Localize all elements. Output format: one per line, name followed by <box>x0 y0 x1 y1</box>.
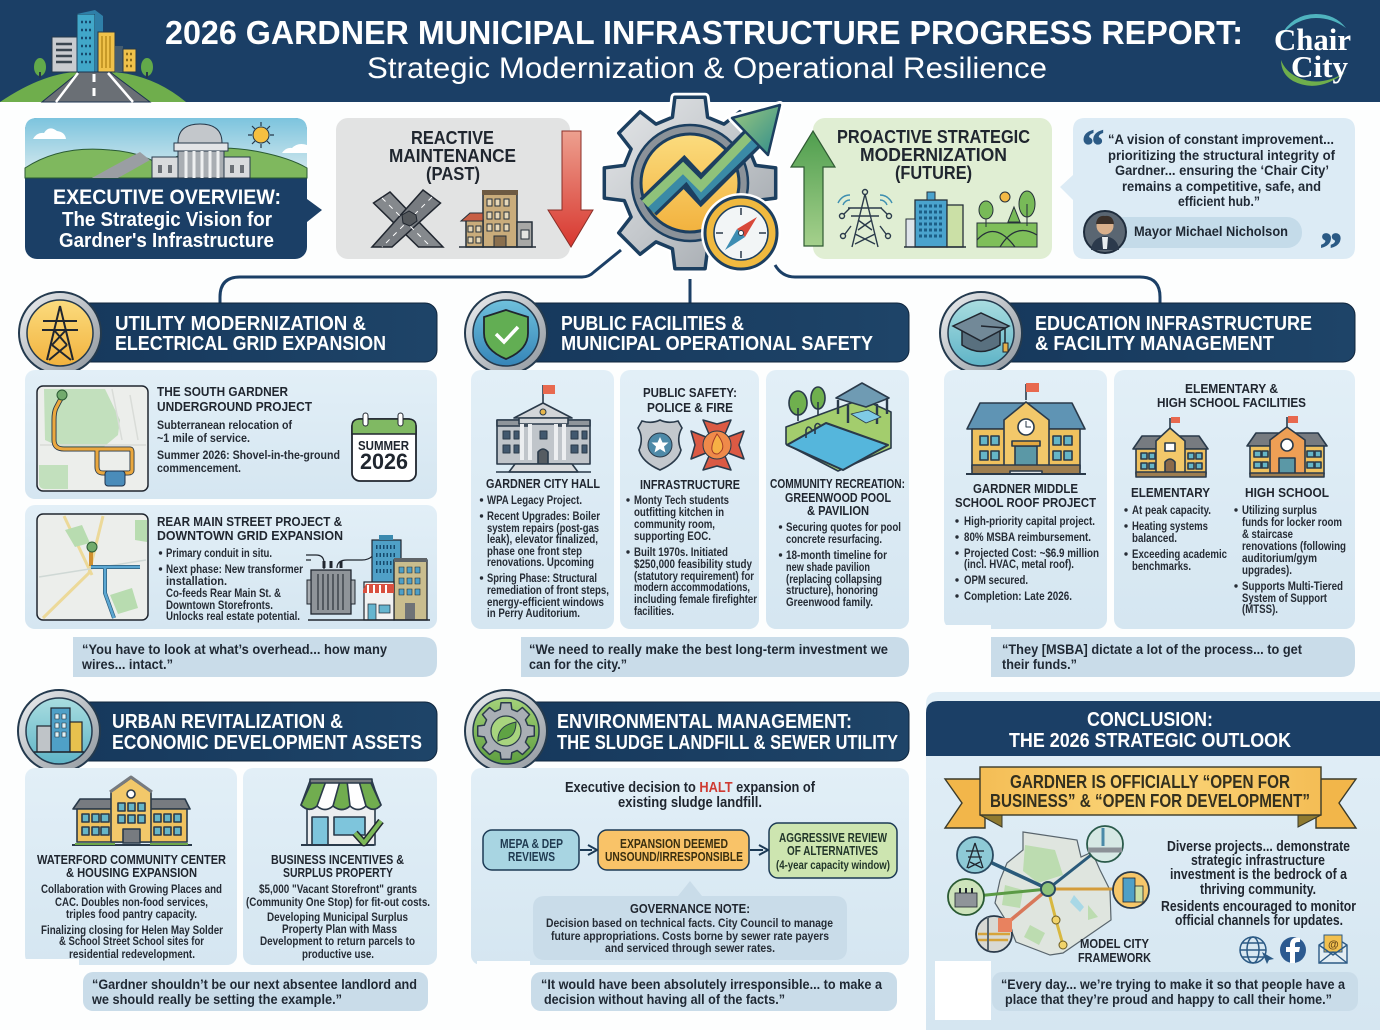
icon: waterford building <box>72 777 192 845</box>
card: gardner middle school roof: OPM secured. <box>964 573 1028 587</box>
card: gardner middle school roof: Projected Cost: ~$6.9 million <box>964 546 1099 560</box>
card: community recreation: new shade pavilion <box>786 560 870 574</box>
icon: smart tower <box>838 190 892 247</box>
overview heading: EXECUTIVE OVERVIEW: <box>53 186 281 209</box>
card: south gardner underground: UNDERGROUND PROJECT <box>157 399 312 414</box>
card: rear main street: DOWNTOWN GRID EXPANSION <box>157 528 343 543</box>
icon: summer 2026 calendar <box>352 413 416 481</box>
card: public safety police and fire: (statutory requirement) for <box>634 569 754 583</box>
icon: elementary school <box>1133 417 1208 477</box>
icon: green landscape <box>977 191 1037 247</box>
icon: summer 2026 calendar: SUMMER <box>358 438 410 453</box>
card: public safety police and fire: PUBLIC SAFETY: <box>643 385 737 400</box>
mayor name tag: Mayor Michael Nicholson <box>1134 223 1288 239</box>
card: business incentives: BUSINESS INCENTIVES & <box>271 852 404 867</box>
quote: proud and happy: place that they’re proud and happy to call their home.” <box>1005 991 1332 1007</box>
icon: email envelope <box>1319 935 1347 963</box>
card: community recreation: 18-month timeline for <box>786 548 887 562</box>
governance note callout <box>533 881 847 960</box>
card: gardner middle school roof: Completion: Late 2026. <box>964 589 1072 603</box>
card: gardner city hall: in Perry Auditorium. <box>487 606 580 620</box>
flow step: MEPA and DEP reviews: REVIEWS <box>508 849 555 864</box>
governance note callout: and serviced through sewer rates. <box>605 941 775 955</box>
section header <box>18 690 437 772</box>
icon: city hall <box>496 385 591 472</box>
panel: reactive maintenance past: MAINTENANCE <box>389 145 516 166</box>
section header <box>465 690 909 772</box>
conclusion header: CONCLUSION: <box>1087 708 1213 731</box>
card: elementary and high school facilities: renovations (following <box>1242 539 1346 553</box>
card: business incentives: $5,000 "Vacant Storefront" grants <box>259 882 417 896</box>
card: south gardner underground: Summer 2026: Shovel-in-the-ground <box>157 448 340 462</box>
card: community recreation: Securing quotes for pool <box>786 520 901 534</box>
section header: ENVIRONMENTAL MANAGEMENT: <box>557 711 852 733</box>
card: south gardner underground: ~1 mile of service. <box>157 431 250 445</box>
card: gardner middle school roof: GARDNER MIDDLE <box>973 481 1078 496</box>
card: south gardner underground: Subterranean relocation of <box>157 418 293 432</box>
card: elementary and high school facilities: HIGH SCHOOL <box>1245 485 1329 500</box>
card: elementary and high school facilities: funds for locker room <box>1242 515 1342 529</box>
card: gardner city hall: Spring Phase: Structural <box>487 571 597 585</box>
quote: absentee landlord: “Gardner shouldn’t be our next absentee landlord and <box>92 976 417 992</box>
panel: mayor quote: ” <box>1320 224 1342 273</box>
quote: absentee landlord: we should really be setting the example.” <box>91 991 342 1007</box>
quote: long-term investment: “We need to really make the best long-term investment we <box>529 641 888 657</box>
icon: compass <box>701 193 781 273</box>
card: elementary and high school facilities: System of Support <box>1242 591 1327 605</box>
quote: MSBA process: their funds.” <box>1002 656 1077 672</box>
conclusion text: investment is the bedrock of a <box>1170 867 1348 883</box>
panel: proactive strategic modernization future: PROACTIVE STRATEGIC <box>837 126 1030 147</box>
card: waterford community center: Finalizing closing for Helen May Solder <box>41 923 223 937</box>
card: community recreation: COMMUNITY RECREATION: <box>770 476 905 491</box>
section header <box>940 292 1355 374</box>
card: public safety police and fire: Built 1970s. Initiated <box>634 545 728 559</box>
icon: transformer and downtown buildings <box>306 535 430 620</box>
icon: storefront with check <box>301 779 381 845</box>
card: waterford community center: residential redevelopment. <box>69 947 195 961</box>
map: rear main street route <box>37 514 148 620</box>
card: elementary and high school facilities: Exceeding academic <box>1132 547 1227 561</box>
header banner <box>0 0 1380 102</box>
card: public safety police and fire: community room, <box>634 517 715 531</box>
card: public safety police and fire: $250,000 feasibility study <box>634 557 752 571</box>
flow step: aggressive review of alternatives <box>769 823 897 878</box>
card: waterford community center: & School Street School sites for <box>59 934 204 948</box>
card: public safety police and fire: facilities. <box>634 604 674 618</box>
card: gardner city hall: system repairs (post-gas <box>487 521 599 535</box>
mayor name tag <box>1084 211 1302 253</box>
conclusion text: official channels for updates. <box>1175 913 1343 929</box>
icon: cracked roads <box>372 190 443 247</box>
card: elementary and high school facilities: ELEMENTARY <box>1131 485 1210 500</box>
white patch at lower left of conclusion <box>935 961 991 1020</box>
card: public safety police and fire: INFRASTRUCTURE <box>640 477 740 492</box>
report title: 2026 GARDNER MUNICIPAL INFRASTRUCTURE PROGRESS REPORT: <box>165 14 1243 51</box>
quote: absentee landlord <box>83 972 428 1011</box>
panel: mayor quote: “A vision of constant improvement... <box>1108 131 1334 147</box>
flow step: expansion deemed unsound: UNSOUND/IRRESPONSIBLE <box>605 849 743 864</box>
card: gardner middle school roof: 80% MSBA reimbursement. <box>964 530 1091 544</box>
quote: overhead wires: “You have to look at what’s overhead... how many <box>82 641 387 657</box>
section header <box>465 292 909 374</box>
card: rear main street: Downtown Storefronts. <box>166 598 273 612</box>
section header: UTILITY MODERNIZATION & <box>115 313 366 335</box>
flow step: expansion deemed unsound: EXPANSION DEEMED <box>620 836 728 851</box>
card: public safety police and fire <box>620 370 759 629</box>
flow step: MEPA and DEP reviews: MEPA & DEP <box>500 836 563 851</box>
card: community recreation: & PAVILION <box>807 503 869 518</box>
card: sludge landfill decision: existing sludge landfill. <box>618 795 762 811</box>
panel: proactive strategic modernization future <box>791 118 1052 259</box>
section header: PUBLIC FACILITIES & <box>561 313 744 335</box>
Chair City logo: City <box>1291 49 1348 84</box>
panel: reactive maintenance past: (PAST) <box>426 163 480 184</box>
quote: MSBA process <box>991 637 1355 677</box>
card: community recreation: GREENWOOD POOL <box>785 490 891 505</box>
panel: reactive maintenance past <box>336 118 593 259</box>
card: business incentives: (Community One Stop) for fit-out costs. <box>246 895 430 909</box>
card: business incentives: Property Plan with Mass <box>282 922 397 936</box>
panel: public facilities <box>465 292 909 677</box>
card: elementary and high school facilities: HIGH SCHOOL FACILITIES <box>1157 395 1306 410</box>
header illustration: city skyline and road <box>0 10 186 102</box>
quote: long-term investment: can for the city.” <box>529 656 627 672</box>
governance note callout: future appropriations. Costs borne by sewer rate payers <box>551 929 829 943</box>
governance note callout: GOVERNANCE NOTE: <box>630 901 750 916</box>
arrow: reviews to expansion <box>580 845 597 855</box>
card: public safety police and fire: POLICE & FIRE <box>647 400 733 415</box>
card: rear main street: Primary conduit in situ. <box>166 546 272 560</box>
quote: proud and happy <box>992 972 1358 1011</box>
card: gardner city hall: energy-efficient windows <box>487 595 604 609</box>
card: rear main street: installation. <box>166 574 227 588</box>
card: south gardner underground <box>25 370 437 499</box>
card: rear main street: REAR MAIN STREET PROJECT & <box>157 514 342 529</box>
panel: executive overview: The Strategic Vision for <box>62 209 272 231</box>
card: elementary and high school facilities: Utilizing surplus <box>1242 503 1317 517</box>
map: model city framework <box>948 826 1151 965</box>
panel: reactive maintenance past: REACTIVE <box>411 127 494 148</box>
quote: overhead wires: wires... intact.” <box>81 656 173 672</box>
quote: irresponsible without facts: decision without having all of the facts.” <box>544 991 785 1007</box>
banner: open for business: GARDNER IS OFFICIALLY “OPEN FOR <box>1010 771 1290 792</box>
icon: modern buildings <box>904 192 966 247</box>
panel: mayor quote: Gardner... ensuring the ‘Chair City’ <box>1115 162 1329 178</box>
card: rear main street <box>25 505 437 629</box>
section header: ELECTRICAL GRID EXPANSION <box>115 333 386 355</box>
card: waterford community center: triples food pantry capacity. <box>66 907 197 921</box>
card: elementary and high school facilities <box>1114 370 1355 629</box>
icon: globe <box>1240 937 1274 964</box>
icon: email envelope: @ <box>1328 939 1339 951</box>
card: gardner middle school roof <box>944 370 1107 633</box>
icon: middle school <box>966 383 1086 474</box>
card: gardner city hall: renovations. Upcoming <box>487 555 594 569</box>
icon: summer 2026 calendar: 2026 <box>360 449 408 474</box>
panel: mayor quote <box>1060 118 1355 273</box>
card: gardner city hall: leak), elevator finalized, <box>487 532 598 546</box>
panel: mayor quote: efficient hub.” <box>1178 193 1260 209</box>
card: elementary and high school facilities: benchmarks. <box>1132 559 1191 573</box>
card: business incentives <box>243 768 437 965</box>
card: elementary and high school facilities: & staircase <box>1242 527 1293 541</box>
quote: long-term investment <box>521 637 909 677</box>
panel: mayor quote: “ <box>1082 121 1104 170</box>
landfill decision statement: Executive decision to HALT expansion of <box>565 780 815 796</box>
panel: education infrastructure <box>940 292 1355 677</box>
flow step: aggressive review of alternatives: OF ALTERNATIVES <box>787 843 878 858</box>
icon: down arrow <box>548 131 593 247</box>
map: model city framework: MODEL CITY <box>1080 936 1149 951</box>
section header: ECONOMIC DEVELOPMENT ASSETS <box>112 732 422 754</box>
flow step: MEPA and DEP reviews <box>483 830 579 870</box>
panel: proactive strategic modernization future: (FUTURE) <box>895 162 972 183</box>
conclusion header <box>926 701 1380 756</box>
governance note callout: Decision based on technical facts. City Council to manage <box>546 916 833 930</box>
conclusion text <box>1161 839 1356 929</box>
map: south gardner route <box>37 386 148 491</box>
card: community recreation <box>766 370 909 629</box>
card: elementary and high school facilities: Heating systems <box>1132 519 1208 533</box>
card: gardner city hall: phase one front step <box>487 544 582 558</box>
icon: facebook <box>1280 937 1306 963</box>
card: elementary and high school facilities: At peak capacity. <box>1132 503 1211 517</box>
card: south gardner underground: commencement. <box>157 461 241 475</box>
card: business incentives: SURPLUS PROPERTY <box>283 865 393 880</box>
card: public safety police and fire: Monty Tech students <box>634 493 729 507</box>
card: gardner middle school roof: High-priority capital project. <box>964 514 1095 528</box>
card: public safety police and fire: outfitting kitchen in <box>634 505 724 519</box>
card: public safety police and fire: modern accommodations, <box>634 580 750 594</box>
section header <box>19 292 437 374</box>
section header: MUNICIPAL OPERATIONAL SAFETY <box>561 333 874 355</box>
card: waterford community center <box>25 768 237 967</box>
Chair City logo: Chair <box>1274 22 1351 57</box>
section header: EDUCATION INFRASTRUCTURE <box>1035 313 1312 335</box>
card: rear main street: Co-feeds Rear Main St. & <box>166 586 281 600</box>
banner: open for business <box>945 767 1356 828</box>
icon: aging building <box>459 190 536 247</box>
section header: URBAN REVITALIZATION & <box>112 711 343 733</box>
section header: & FACILITY MANAGEMENT <box>1035 333 1274 355</box>
panel: conclusion <box>926 692 1380 1030</box>
card: community recreation: Greenwood family. <box>786 595 873 609</box>
quote: irresponsible without facts <box>531 972 897 1011</box>
card: public safety police and fire: including female firefighter <box>634 592 757 606</box>
map: model city framework: FRAMEWORK <box>1078 950 1151 965</box>
flow step: expansion deemed unsound <box>598 830 749 870</box>
connector lines from gear to section headers <box>220 250 1160 304</box>
card: elementary and high school facilities: upgrades). <box>1242 563 1292 577</box>
card: rear main street: Next phase: New transformer <box>166 562 303 576</box>
card: gardner city hall: remediation of front steps, <box>487 583 609 597</box>
card: elementary and high school facilities: Supports Multi-Tiered <box>1242 579 1343 593</box>
card: gardner middle school roof: SCHOOL ROOF PROJECT <box>955 495 1096 510</box>
card: gardner city hall: WPA Legacy Project. <box>487 493 582 507</box>
panel: proactive strategic modernization future: MODERNIZATION <box>860 144 1007 165</box>
panel: executive overview: Gardner's Infrastructure <box>59 230 274 252</box>
conclusion text: Diverse projects... demonstrate <box>1167 839 1350 855</box>
conclusion text: strategic infrastructure <box>1191 853 1325 869</box>
card: public safety police and fire: supporting EOC. <box>634 529 711 543</box>
icon: high school <box>1247 416 1327 477</box>
card: elementary and high school facilities: (MTSS). <box>1242 602 1278 616</box>
quote: overhead wires <box>73 637 437 677</box>
card: sludge landfill decision <box>471 768 909 967</box>
banner: open for business: BUSINESS” & “OPEN FOR DEVELOPMENT” <box>990 790 1310 811</box>
card: waterford community center: Collaboration with Growing Places and <box>41 882 222 896</box>
icon: central gear with growth arrow and compass <box>604 97 781 273</box>
card: business incentives: Development to return parcels to <box>260 934 415 948</box>
icon: fire department cross <box>691 420 744 470</box>
card: community recreation: (replacing collapsing <box>786 572 882 586</box>
card: gardner city hall <box>471 370 614 629</box>
quote: proud and happy: “Every day... we’re trying to make it so that people have a <box>1001 976 1345 992</box>
card: business incentives: Developing Municipal Surplus <box>267 910 408 924</box>
card: gardner middle school roof: (incl. HVAC, metal roof). <box>964 557 1074 571</box>
report subtitle: Strategic Modernization & Operational Resilience <box>367 52 1047 85</box>
card: elementary and high school facilities: balanced. <box>1132 531 1177 545</box>
quote: MSBA process: “They [MSBA] dictate a lot of the process... to get <box>1002 641 1302 657</box>
card: business incentives: productive use. <box>302 947 374 961</box>
icon: police badge <box>638 420 682 470</box>
card: elementary and high school facilities: ELEMENTARY & <box>1185 381 1278 396</box>
card: gardner city hall: GARDNER CITY HALL <box>486 476 600 491</box>
card: rear main street: Unlocks real estate potential. <box>166 609 300 623</box>
icon: up arrow <box>791 131 835 246</box>
Chair City logo <box>1274 14 1351 86</box>
conclusion text: thriving community. <box>1200 882 1316 898</box>
panel: mayor quote: prioritizing the structural integrity of <box>1108 147 1335 163</box>
panel: utility modernization <box>19 292 437 677</box>
flow step: aggressive review of alternatives: AGGRESSIVE REVIEW <box>779 830 888 845</box>
flow step: aggressive review of alternatives: (4-year capacity window) <box>776 858 890 872</box>
panel: mayor quote: remains a competitive, safe, and <box>1122 178 1321 194</box>
panel: environmental management <box>465 690 909 1011</box>
card: community recreation: concrete resurfacing. <box>786 532 882 546</box>
conclusion header: THE 2026 STRATEGIC OUTLOOK <box>1009 729 1291 752</box>
card: waterford community center: WATERFORD COMMUNITY CENTER <box>37 852 227 867</box>
card: elementary and high school facilities: auditorium/gym <box>1242 551 1317 565</box>
card: south gardner underground: THE SOUTH GARDNER <box>157 384 289 399</box>
arrow: expansion to alternatives <box>750 845 768 855</box>
panel: executive overview <box>25 118 322 259</box>
panel: urban revitalization <box>18 690 437 1011</box>
card: gardner city hall: Recent Upgrades: Boiler <box>487 509 600 523</box>
icon: pool and pavilion <box>786 383 891 471</box>
card: community recreation: structure), honoring <box>786 583 878 597</box>
card: waterford community center: & HOUSING EXPANSION <box>66 865 197 880</box>
quote: irresponsible without facts: “It would have been absolutely irresponsible... to make a <box>541 976 882 992</box>
card: waterford community center: CAC. Doubles non-food services, <box>55 895 208 909</box>
section header: THE SLUDGE LANDFILL & SEWER UTILITY <box>557 732 899 754</box>
